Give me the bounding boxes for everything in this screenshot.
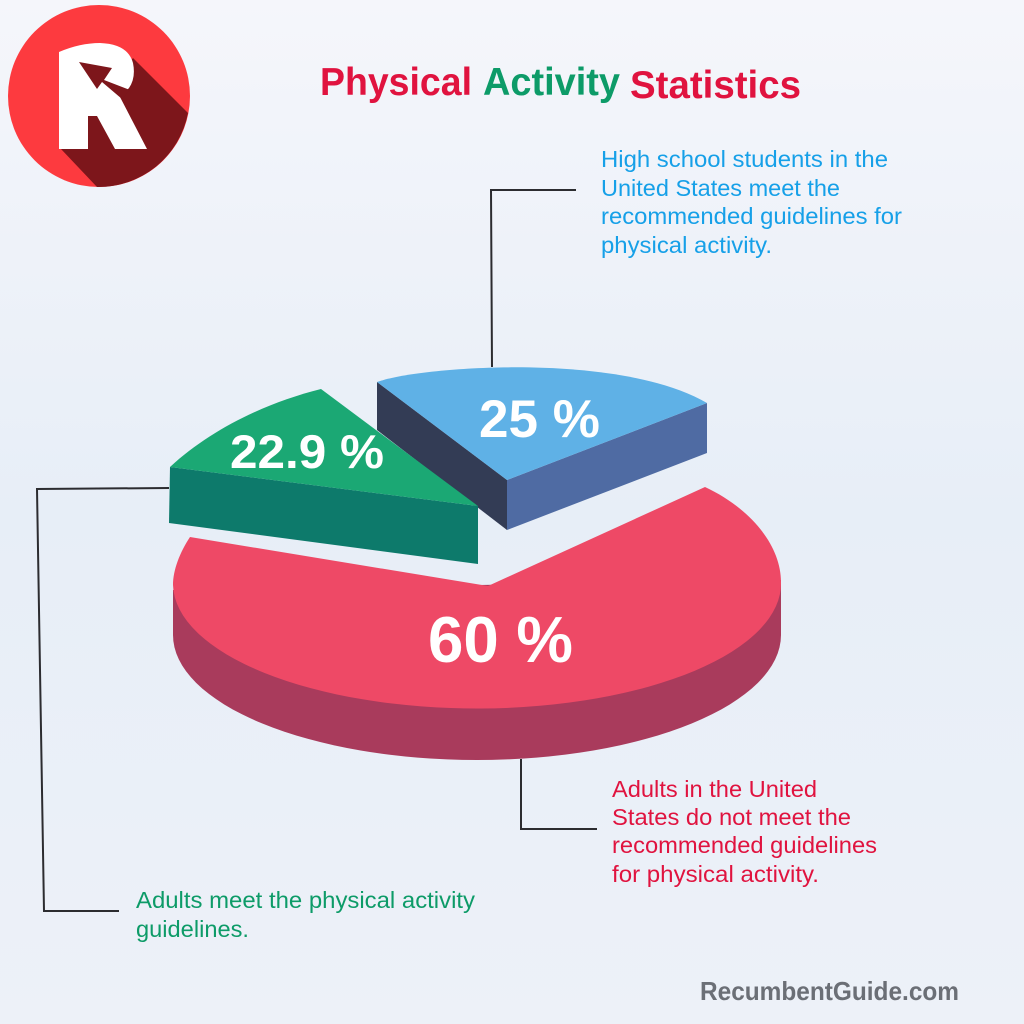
text block: red callout: States do not meet the (612, 804, 851, 830)
pie slice: blue 25% (377, 367, 707, 530)
text block: blue callout: recommended guidelines for (601, 203, 902, 229)
text block: red callout: recommended guidelines (612, 832, 877, 858)
text block: red callout (612, 776, 877, 887)
label: 60 %: 60 % (428, 603, 573, 676)
title: Physical (320, 61, 472, 104)
pie slice: red 60% (173, 487, 781, 760)
text block: red callout: Adults in the United (612, 776, 817, 802)
text block: green callout (136, 887, 476, 942)
text block: blue callout: United States meet the (601, 175, 840, 201)
text block: green callout: Adults meet the physical activity (136, 887, 476, 913)
text block: green callout: guidelines. (136, 916, 249, 942)
label: 22.9 %: 22.9 % (230, 425, 384, 478)
text block: blue callout: High school students in the (601, 146, 888, 172)
title (320, 61, 801, 107)
text block: blue callout: physical activity. (601, 232, 772, 258)
text block: blue callout (601, 146, 902, 258)
title: Activity (483, 61, 620, 104)
text block: red callout: for physical activity. (612, 861, 819, 887)
watermark: RecumbentGuide.com (700, 976, 959, 1006)
connector: green callout (37, 488, 169, 911)
label: 25 %: 25 % (479, 390, 600, 449)
connector: blue callout (491, 190, 576, 367)
logo: R arrow badge (8, 5, 190, 187)
title: Statistics (630, 64, 801, 107)
pie slice: green 22.9% (169, 389, 478, 564)
connector: red callout (521, 759, 597, 829)
